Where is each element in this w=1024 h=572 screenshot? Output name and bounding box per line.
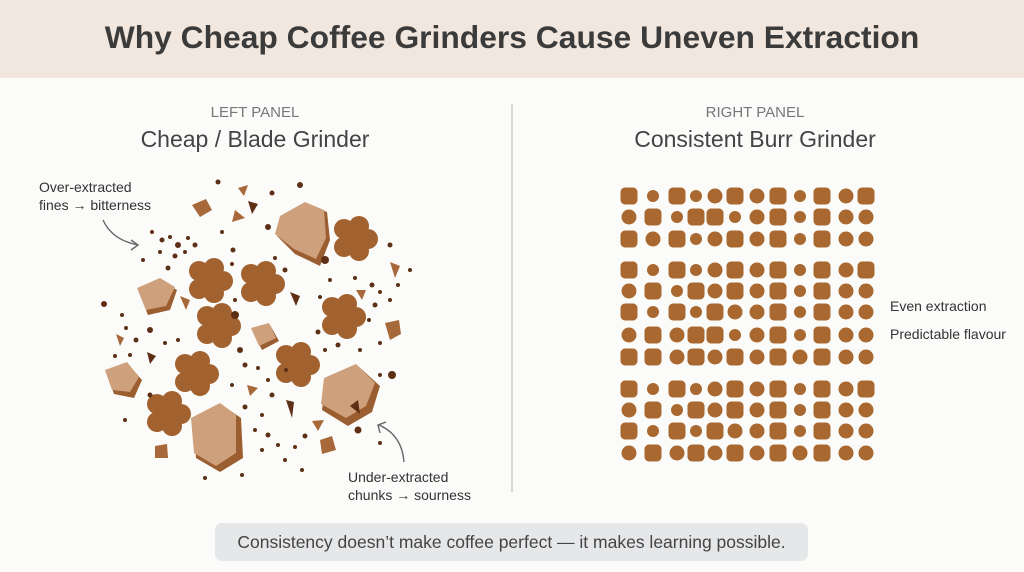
left panel heading: Cheap / Blade Grinder [141, 126, 369, 152]
annotation: under-extracted chunks [348, 469, 471, 503]
arrow: fines [103, 220, 138, 250]
scatter: blade grinder grounds [101, 180, 412, 480]
annotation: over-extracted fines: Over-extracted [39, 179, 132, 195]
arrow: chunks [378, 422, 404, 462]
annotation: over-extracted fines: fines → bitterness [39, 197, 151, 213]
header band [0, 0, 1024, 78]
divider [511, 104, 513, 492]
grid: burr grinder grounds [620, 188, 874, 462]
right panel label: RIGHT PANEL [706, 104, 804, 121]
label: predictable flavour: Predictable flavour [890, 326, 1006, 342]
annotation: over-extracted fines [39, 179, 151, 213]
annotation: under-extracted chunks: chunks → sourness [348, 487, 471, 503]
right panel heading: Consistent Burr Grinder [634, 126, 876, 152]
callout: bottom message [215, 523, 808, 561]
label: even extraction: Even extraction [890, 298, 986, 314]
left panel label: LEFT PANEL [211, 104, 299, 121]
annotation: under-extracted chunks: Under-extracted [348, 469, 448, 485]
title: Why Cheap Coffee Grinders Cause Uneven Extraction [105, 19, 919, 55]
callout: bottom message: Consistency doesn’t make coffee perfect — it makes learning possible. [237, 532, 786, 552]
